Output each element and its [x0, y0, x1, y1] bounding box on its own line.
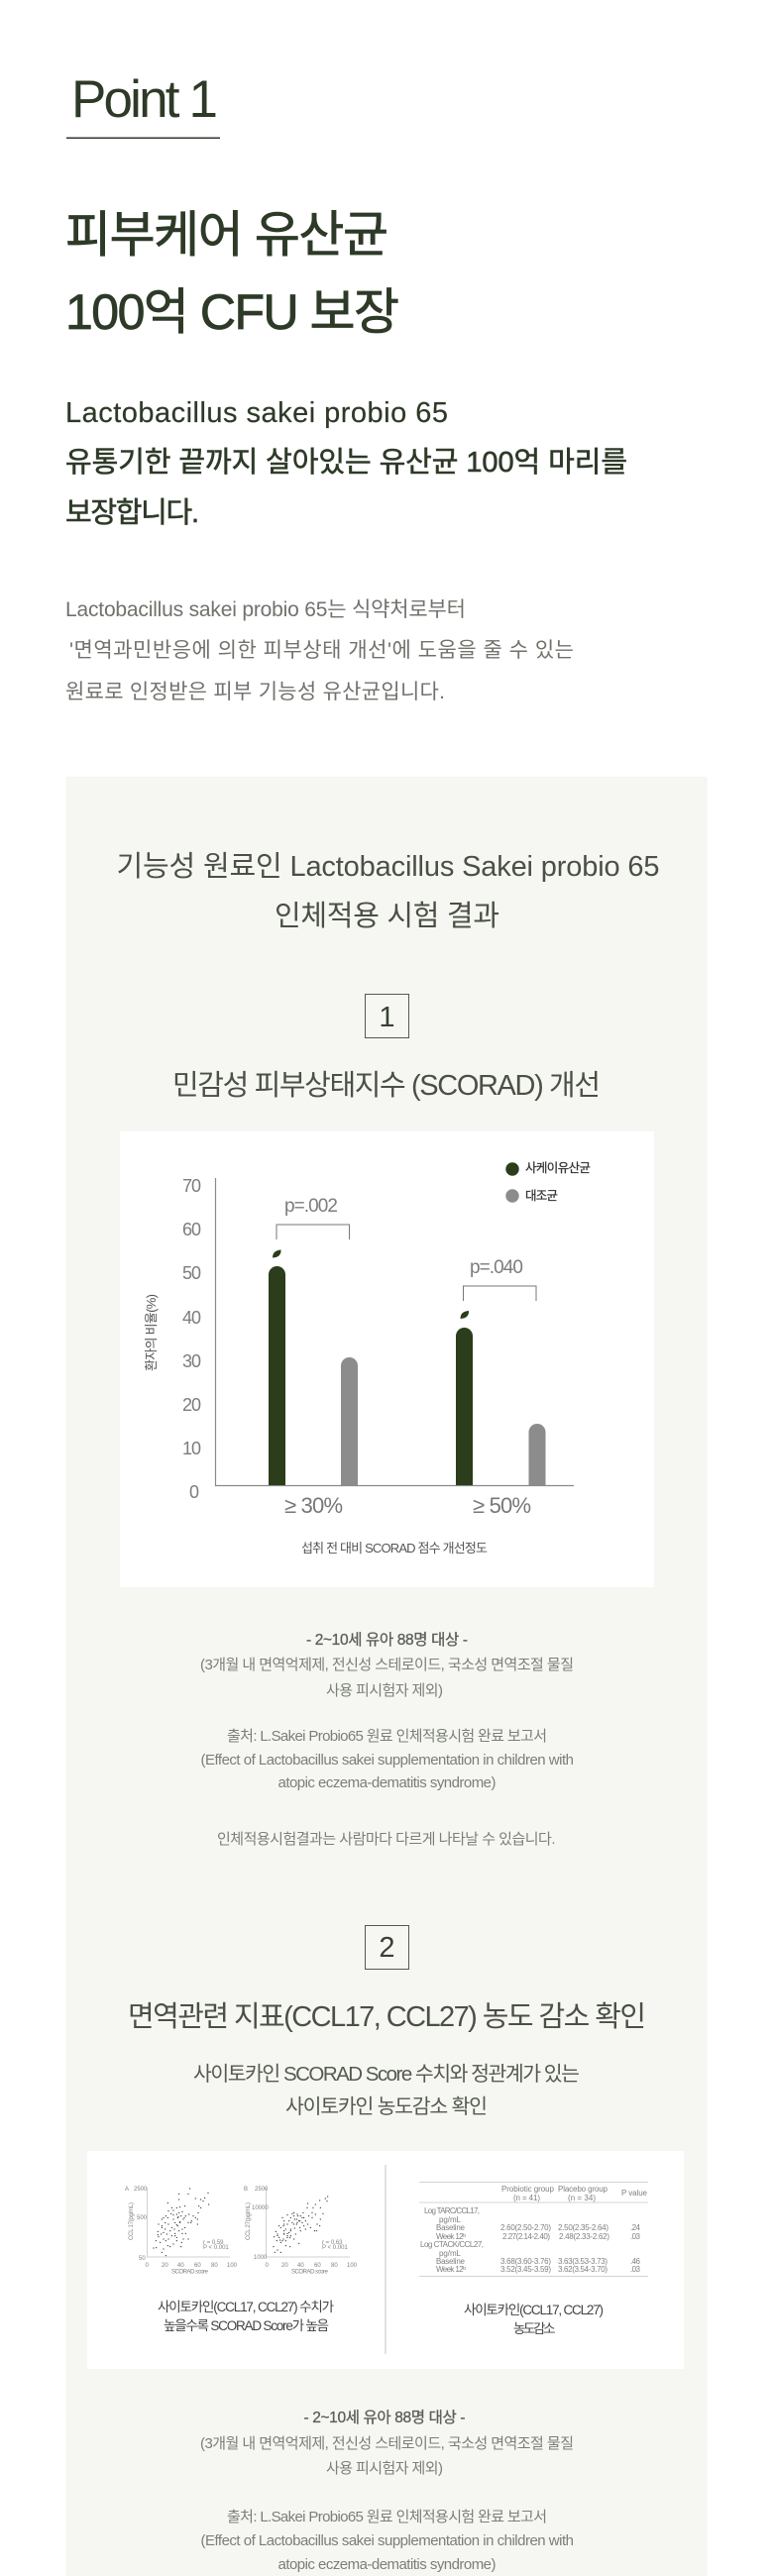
subtitle: 보장합니다.: [65, 497, 199, 529]
data table: .46: [630, 2257, 641, 2266]
icon: leaf marker 2: [460, 1311, 469, 1319]
panel heading: [117, 851, 660, 932]
scatter plot B: 100: [347, 2263, 358, 2269]
y axis tick labels: 60: [182, 1220, 201, 1239]
vertical divider: [385, 2165, 386, 2354]
section description: [193, 2063, 580, 2118]
data table: 2.60(2.50-2.70): [500, 2223, 551, 2232]
study notes 1: - 2~10세 유아 88명 대상 -: [306, 1631, 468, 1649]
panel: clinical results: [65, 777, 708, 2576]
number badge 1: [365, 995, 408, 1038]
scatter plot A: [125, 2187, 238, 2275]
y axis tick labels: 40: [182, 1308, 201, 1328]
subtitle: 유통기한 끝까지 살아있는 유산균 100억 마리를: [65, 447, 627, 479]
scatter plot A: r = 0.59: [203, 2240, 224, 2246]
data table: 3.62(3.54-3.70): [558, 2265, 607, 2274]
data table: 2.50(2.35-2.64): [558, 2223, 608, 2232]
x axis labels: ≥ 50%: [473, 1493, 531, 1518]
subtitle: Lactobacillus sakei probio 65: [65, 397, 448, 429]
y axis tick labels: 10: [182, 1439, 201, 1458]
study notes 2: atopic eczema-dematitis syndrome): [277, 2556, 496, 2573]
bars: 30 percent group: [269, 1266, 358, 1485]
study notes 1: 사용 피시험자 제외): [326, 1682, 443, 1699]
y axis tick labels: 30: [182, 1351, 201, 1371]
data table: (n = 34): [568, 2194, 596, 2202]
scatter plot A: 500: [137, 2215, 148, 2221]
significance bracket p=.002: p=.002: [284, 1196, 338, 1217]
data table: 3.52(3.45-3.59): [500, 2265, 551, 2274]
scatter plot A: 80: [211, 2263, 218, 2269]
data table: Log TARC/CCL17,: [424, 2206, 480, 2215]
subtitle: [65, 397, 627, 529]
number badge 1: 1: [379, 1002, 395, 1033]
study notes 2: [200, 2409, 574, 2573]
data table: Week 12ᵇ: [436, 2265, 466, 2274]
scatter plot A: SCORAD score: [171, 2269, 209, 2275]
scatter plot A: 0: [145, 2263, 149, 2269]
data table: P value: [621, 2189, 648, 2198]
main title: [65, 207, 399, 340]
caption: correlation: [158, 2300, 334, 2333]
caption: concentration decrease: 사이토카인(CCL17, CCL27): [464, 2303, 604, 2317]
point label: Point 1: [71, 70, 218, 129]
intro body text: '면역과민반응에 의한 피부상태 개선'에 도움을 줄 수 있는: [69, 639, 574, 662]
study notes 1: [200, 1631, 574, 1848]
section heading 1: 민감성 피부상태지수 (SCORAD) 개선: [172, 1069, 601, 1102]
study notes 2: 출처: L.Sakei Probio65 원료 인체적용시험 완료 보고서: [227, 2509, 547, 2525]
scatter plot A: 100: [227, 2263, 238, 2269]
data table: pg/mL: [439, 2249, 462, 2258]
data table: [419, 2182, 648, 2277]
legend: 대조균: [525, 1189, 558, 1203]
scatter plot B: 20: [281, 2263, 288, 2269]
bars: 50 percent group: [456, 1328, 545, 1485]
number badge 2: [365, 1926, 408, 1970]
scatter plot A: CCL 17(pg/mL): [129, 2202, 135, 2240]
scatter plot A: A: [125, 2187, 129, 2193]
panel heading: 인체적용 시험 결과: [275, 901, 499, 932]
significance bracket p=.040: [464, 1257, 536, 1301]
icon: leaf marker 1: [273, 1250, 281, 1258]
significance bracket p=.040: p=.040: [470, 1257, 523, 1278]
legend: [505, 1161, 591, 1203]
chart card: SCORAD bar chart: [120, 1131, 654, 1587]
y axis tick labels: 70: [182, 1176, 201, 1196]
data table: 2.27(2.14-2.40): [502, 2232, 550, 2241]
y axis tick labels: 50: [182, 1263, 201, 1283]
data table: (n = 41): [513, 2194, 540, 2202]
study notes 1: 인체적용시험결과는 사람마다 다르게 나타날 수 있습니다.: [217, 1831, 555, 1848]
scatter plot B: 40: [297, 2263, 304, 2269]
study notes 1: (Effect of Lactobacillus sakei supplementation in children with: [200, 1752, 574, 1769]
scatter plot A: P < 0.001: [203, 2245, 229, 2251]
scatter plot B: r = 0.63: [322, 2240, 343, 2246]
scatter plot B: 80: [331, 2263, 338, 2269]
data table: Log CTACK/CCL27,: [420, 2240, 484, 2249]
data table: .03: [630, 2232, 641, 2241]
y axis tick labels: [182, 1176, 201, 1502]
data table: 3.68(3.60-3.76): [500, 2257, 551, 2266]
intro body text: 원료로 인정받은 피부 기능성 유산균입니다.: [65, 681, 445, 703]
study notes 2: 사용 피시험자 제외): [326, 2460, 443, 2477]
scatter plot B: 60: [314, 2263, 321, 2269]
x axis labels: ≥ 30%: [284, 1493, 343, 1518]
data table: Placebo group: [558, 2185, 608, 2194]
scatter plot A: 20: [162, 2263, 168, 2269]
scatter plot B: 1000: [254, 2255, 268, 2261]
data table: 2.48(2.33-2.62): [559, 2232, 609, 2241]
study notes 1: 출처: L.Sakei Probio65 원료 인체적용시험 완료 보고서: [227, 1728, 547, 1745]
legend: 사케이유산균: [525, 1161, 591, 1175]
caption: concentration decrease: 농도감소: [513, 2321, 555, 2336]
panel heading: 기능성 원료인 Lactobacillus Sakei probio 65: [117, 851, 660, 883]
caption: concentration decrease: [464, 2303, 604, 2336]
y axis title: 환자의 비율(%): [144, 1294, 159, 1371]
study notes 1: atopic eczema-dematitis syndrome): [277, 1774, 496, 1791]
caption: correlation: 높을수록 SCORAD Score가 높음: [164, 2318, 329, 2333]
data table: Probiotic group: [501, 2185, 555, 2194]
card: cytokine evidence: [87, 2151, 684, 2369]
section description: 사이토카인 농도감소 확인: [285, 2095, 488, 2118]
section description: 사이토카인 SCORAD Score 수치와 정관계가 있는: [193, 2063, 580, 2086]
x axis labels: [284, 1493, 531, 1518]
scatter plot A: 40: [177, 2263, 184, 2269]
scatter plot B: B: [244, 2187, 248, 2193]
scatter plot A: 50: [139, 2256, 146, 2262]
study notes 2: - 2~10세 유아 88명 대상 -: [303, 2409, 466, 2426]
y axis tick labels: 20: [182, 1395, 201, 1415]
significance bracket p=.002: [276, 1196, 349, 1239]
scatter plot A: 60: [194, 2263, 201, 2269]
caption: correlation: 사이토카인(CCL17, CCL27) 수치가: [158, 2300, 334, 2314]
intro body text: Lactobacillus sakei probio 65는 식약처로부터: [65, 598, 466, 621]
scatter plot B: 0: [266, 2263, 270, 2269]
data table: pg/mL: [439, 2215, 462, 2224]
scatter plot A: 2500: [134, 2187, 148, 2193]
intro body text: [65, 598, 574, 703]
study notes 1: (3개월 내 면역억제제, 전신성 스테로이드, 국소성 면역조절 물질: [200, 1657, 574, 1673]
study notes 2: (Effect of Lactobacillus sakei supplementation in children with: [200, 2532, 574, 2549]
data table: .03: [630, 2265, 641, 2274]
x axis title: 섭취 전 대비 SCORAD 점수 개선정도: [301, 1541, 488, 1556]
data table: Baseline: [436, 2257, 466, 2266]
data table: 3.63(3.53-3.73): [558, 2257, 607, 2266]
scatter plot B: P < 0.001: [322, 2245, 348, 2251]
number badge 2: 2: [379, 1932, 395, 1964]
main title: 100억 CFU 보장: [65, 284, 399, 340]
y axis tick labels: 0: [189, 1482, 199, 1502]
data table: Week 12ᵇ: [436, 2232, 466, 2241]
data table: Baseline: [436, 2223, 466, 2232]
scatter plot B: 2500: [255, 2187, 269, 2193]
study notes 2: (3개월 내 면역억제제, 전신성 스테로이드, 국소성 면역조절 물질: [200, 2435, 574, 2452]
main title: 피부케어 유산균: [65, 207, 388, 263]
scatter plot B: CCL 27(pg/mL): [246, 2202, 252, 2240]
data table: .24: [630, 2223, 641, 2232]
scatter plot B: SCORAD score: [291, 2269, 329, 2275]
scatter plot B: 10000: [252, 2205, 269, 2211]
chart axes: [216, 1178, 574, 1486]
scatter plot B: [244, 2187, 358, 2275]
section heading 2: 면역관련 지표(CCL17, CCL27) 농도 감소 확인: [128, 2000, 646, 2033]
